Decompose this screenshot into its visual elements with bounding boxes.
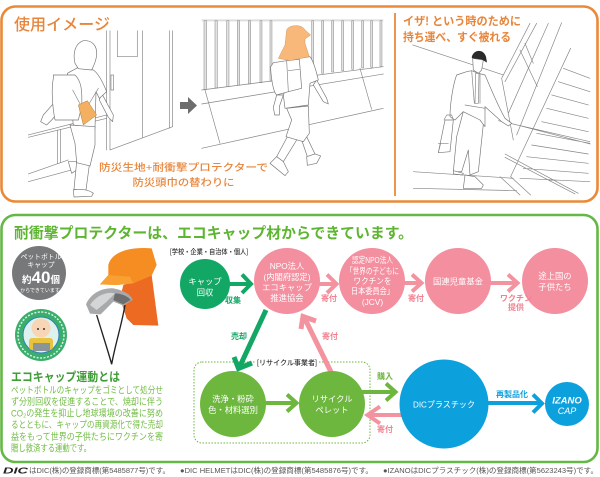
label: collection: 収集	[225, 295, 241, 305]
badge: about 40 bottle caps: 約40個	[22, 268, 60, 287]
node: DIC Plastics	[400, 360, 488, 448]
badge: about 40 bottle caps: からできています	[20, 287, 60, 294]
heading: what is eco cap movement: エコキャップ運動とは	[11, 369, 120, 384]
label: vaccine provision: ワクチン	[500, 293, 532, 303]
arrow: recycled into product	[486, 394, 542, 412]
label: sale: 売却	[231, 331, 247, 341]
node: washing and crushing	[200, 371, 266, 437]
illustration: boy with orange hood	[270, 26, 328, 176]
heading: emergency caption: 持ち運べ、すぐ被れる	[403, 30, 511, 44]
node: JCV: (JCV)	[362, 297, 383, 307]
node: eco cap promotion association: NPO法人	[270, 261, 305, 271]
label: donation 3: 寄付	[322, 331, 338, 341]
caption: hood replacement: 防災頭巾の替わりに	[132, 176, 234, 189]
icon: grey arrow	[180, 97, 197, 114]
node: recycled pellet	[299, 371, 365, 437]
node: IZANO CAP: CAP	[558, 406, 576, 416]
node: JCV: 認定NPO法人	[352, 255, 394, 265]
label: recycling operators: [リサイクル事業者]	[257, 358, 317, 367]
node: eco cap promotion association: (内閣府認定)	[263, 272, 311, 282]
heading: protector material: 耐衝撃プロテクターは、エコキャップ材からできています。	[14, 224, 413, 242]
node: UNICEF fund	[425, 248, 491, 314]
node: cap collection: キャップ	[188, 276, 222, 286]
arrow: sale	[234, 310, 266, 368]
badge: about 40 bottle caps: ペットボトル	[21, 253, 62, 261]
badge: about 40 bottle caps: キャップ	[27, 261, 55, 269]
text: eco cap description: 益をもって世界の子供たちにワクチンを寄	[11, 431, 163, 442]
node: recycled pellet: ペレット	[315, 405, 349, 415]
node: recycled pellet: リサイクル	[311, 394, 353, 404]
panel: eco cap	[2, 215, 598, 462]
label: vaccine provision	[500, 293, 532, 312]
label: vaccine provision: 提供	[508, 302, 524, 312]
node: DIC Plastics: DICプラスチック	[413, 400, 475, 410]
arrow: donation to JCV	[318, 274, 336, 293]
node: JCV: ワクチンを	[354, 276, 392, 286]
text: eco cap description: 贈し救済する運動です。	[11, 442, 91, 454]
illustration: boy with pouch	[41, 41, 113, 197]
node: eco cap promotion association: 推進協会	[270, 293, 304, 303]
label: donation 2: 寄付	[408, 293, 424, 303]
label: purchase: 購入	[377, 371, 393, 381]
arrow: purchase	[360, 384, 396, 400]
arrow: collection	[228, 274, 251, 293]
label: schools, companies, municipalities, individuals: [学校・企業・自治体・個人]	[170, 247, 248, 256]
node: UNICEF fund: 国連児童基金	[433, 276, 484, 286]
node: washing and crushing: 洗浄・粉砕	[212, 394, 254, 404]
illustration: businessman in helmet	[438, 51, 512, 188]
dotted box: recycling operators	[194, 362, 370, 443]
photo: orange cap with protector	[86, 248, 158, 364]
heading: usage image: 使用イメージ	[14, 16, 110, 34]
heading: emergency caption: イザ! という時のために	[403, 14, 521, 28]
node: IZANO CAP: IZANO	[552, 396, 582, 406]
icon: orange hood	[278, 26, 311, 61]
arrow: donation up	[301, 316, 331, 372]
icon: black helmet	[472, 51, 487, 63]
node: cap collection: 回収	[197, 288, 214, 298]
node: children of developing countries: 子供たち	[538, 282, 572, 292]
arrow: donation to UNICEF	[404, 274, 422, 292]
badge: about 40 bottle caps	[12, 246, 66, 300]
node: children of developing countries	[522, 248, 588, 314]
footer: trademark notes	[3, 465, 598, 476]
illustration: corridor background	[28, 31, 173, 182]
node: IZANO CAP	[545, 382, 589, 426]
text: eco cap description: ず分別回収を促進することで、焼却に伴う	[11, 396, 163, 407]
text: eco cap description: ペットボトルのキャップをゴミとして処分せ	[11, 384, 163, 396]
heading: emergency caption	[403, 14, 521, 44]
label: recycled product: 再製品化	[496, 389, 528, 399]
node: eco cap promotion association	[254, 248, 320, 314]
footer: trademark notes: ●DIC HELMETはDIC(株)の登録商標(第5485876号)です。	[180, 465, 373, 475]
text: eco cap description: CO₂の発生を抑止し地球環境の改善に努め	[11, 408, 163, 418]
icon: orange pouch	[78, 101, 97, 125]
node: JCV: 日本委員会」	[351, 286, 394, 296]
footer: trademark notes: はDIC(株)の登録商標(第5485877号)です。	[29, 465, 170, 475]
node: children of developing countries: 途上国の	[538, 271, 572, 281]
label: donation 4: 寄付	[377, 424, 393, 434]
arrow: donation from DIC	[368, 406, 402, 424]
caption: fire-proof material: 防災生地+耐衝撃プロテクターで	[99, 161, 268, 174]
arrow: washing to pellet	[264, 394, 296, 412]
node: cap collection	[180, 259, 230, 309]
illustration: staircase	[413, 23, 590, 195]
node: washing and crushing: 色・材料選別	[208, 405, 258, 415]
logo: eco cap movement mark	[15, 309, 67, 361]
footer: trademark notes: ●IZANOはDICプラスチック(株)の登録商標(第5623243号)です。	[383, 465, 598, 475]
illustration: fence	[202, 19, 383, 148]
text: eco cap description: るとともに、キャップの再資源化で得た売却	[11, 419, 163, 430]
logo: DIC: DIC	[3, 466, 29, 476]
arrow: vaccine provision	[490, 274, 518, 292]
text: eco cap description	[11, 384, 163, 454]
node: JCV: 「世界の子どもに	[346, 266, 399, 276]
panel: usage image	[2, 6, 598, 202]
label: donation 1: 寄付	[321, 293, 337, 303]
node: eco cap promotion association: エコキャップ	[262, 282, 313, 292]
node: JCV	[339, 248, 405, 314]
